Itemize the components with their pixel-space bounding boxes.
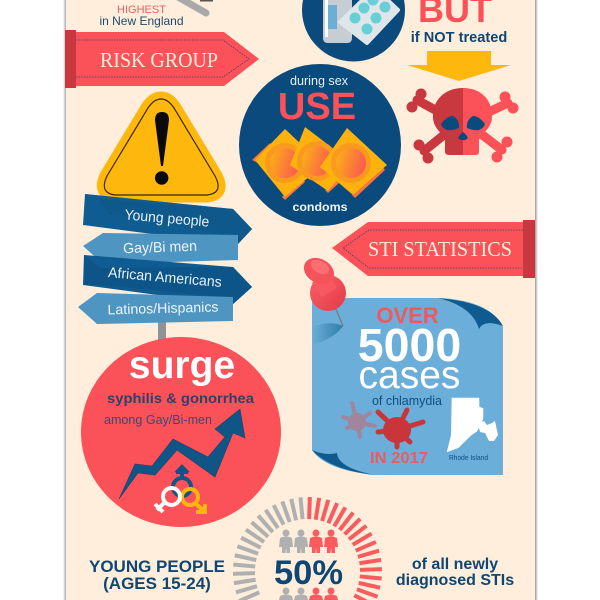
text: condoms: condoms — [292, 200, 348, 214]
text: highest in New England — [99, 4, 184, 28]
icon: push pin — [299, 253, 346, 326]
text: over: OVER — [376, 303, 439, 328]
panel: condoms circle — [239, 64, 401, 226]
text: syphilis and gonorrhea: syphilis & gonorrhea — [107, 390, 254, 406]
panel: chlamydia note — [299, 253, 503, 475]
text: young people ages: (AGES 15-24) — [103, 574, 211, 593]
icon: warning triangle — [104, 99, 218, 195]
text: in 2017: IN 2017 — [370, 450, 428, 467]
chart: percent ring — [233, 497, 382, 600]
panel: young people statistic — [89, 497, 514, 600]
signpost: risk groups — [78, 194, 252, 342]
text: if not treated: if NOT treated — [411, 30, 507, 46]
paper curl: bottom left — [312, 450, 375, 475]
text: highest in New England: HIGHEST — [117, 4, 166, 16]
text: 5000: 5000 — [358, 319, 461, 371]
banner: risk group: RISK GROUP — [100, 48, 218, 72]
icon: blister pack — [340, 0, 398, 43]
text: of chlamydia: of chlamydia — [372, 393, 443, 408]
icon: condom packets — [252, 127, 387, 200]
sign: latinos/hispanics — [78, 293, 233, 324]
text: rhode island: Rhode Island — [449, 453, 488, 462]
text: during sex: during sex — [290, 74, 349, 88]
heading: surge: surge — [129, 344, 235, 387]
arrow: down — [407, 51, 511, 81]
icon: people top row — [279, 530, 338, 553]
text: young people ages: YOUNG PEOPLE — [89, 557, 225, 576]
sign: young people: Young people — [124, 207, 210, 231]
text: young people ages — [89, 557, 225, 593]
icon: magnifier handle — [178, 0, 213, 13]
panel: surge circle — [81, 337, 281, 527]
text: 50 percent: 50% — [274, 554, 343, 592]
banner: risk group — [65, 30, 259, 88]
text: of all newly diagnosed STIs — [396, 556, 514, 589]
text: of all newly diagnosed STIs: diagnosed STIs — [396, 572, 514, 589]
icon: gray splat — [343, 403, 375, 437]
sign: gay/bi men — [83, 233, 238, 264]
heading: use: USE — [278, 86, 356, 128]
sign: gay/bi men: Gay/Bi men — [123, 239, 197, 257]
icon: people bottom row — [279, 588, 338, 600]
icon: skull and crossbones — [406, 88, 518, 164]
banner: sti statistics: STI STATISTICS — [368, 237, 512, 261]
text: highest in New England: in New England — [99, 14, 184, 28]
icon: gender symbols — [155, 467, 205, 512]
sign: latinos/hispanics: Latinos/Hispanics — [107, 299, 219, 317]
text: of all newly diagnosed STIs: of all newly — [412, 556, 498, 573]
banner: sti statistics — [332, 220, 535, 278]
text: among gay/bi-men: among Gay/Bi-men — [104, 413, 212, 427]
icon: medicine bottle — [323, 0, 352, 43]
icon: Rhode Island map — [447, 398, 498, 452]
icon: red splat — [378, 410, 423, 447]
sign: african americans: African Americans — [107, 265, 222, 291]
sign: young people — [83, 194, 252, 245]
text: cases: cases — [359, 354, 460, 397]
panel: pills circle — [302, 0, 405, 62]
sign: african americans — [83, 255, 252, 305]
pin shadow — [312, 323, 343, 345]
signpost pole — [158, 322, 166, 342]
paper curl: top right — [438, 298, 503, 329]
icon: rising arrow — [119, 409, 245, 499]
